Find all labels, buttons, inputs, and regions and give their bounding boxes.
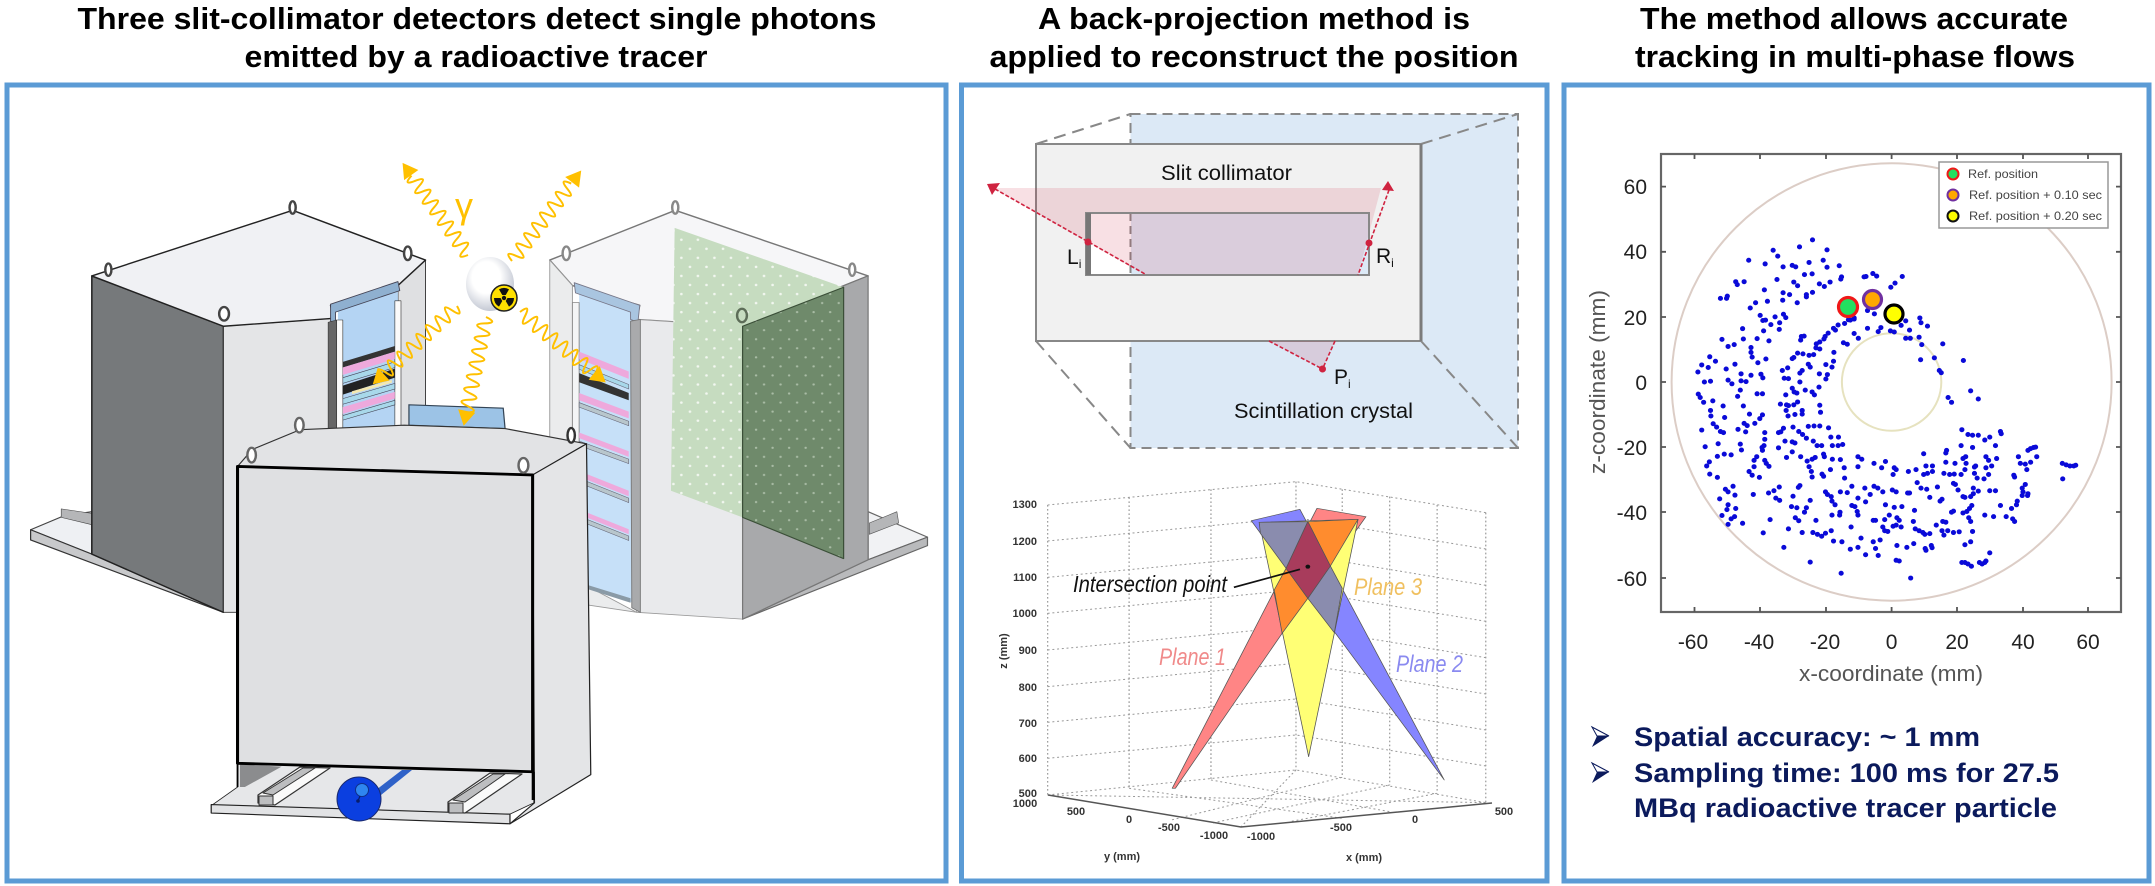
icon: bullet arrow (1592, 763, 1609, 783)
tick labels: 500 (1019, 788, 1037, 800)
tick labels: 1200 (1013, 536, 1037, 548)
heading: detectors: Three slit-collimator detectors detect single photons (78, 1, 876, 36)
tick labels: 1000 (1013, 798, 1037, 810)
panel: tracking results (1564, 85, 2149, 881)
slit collimator plate (1036, 144, 1421, 341)
axes (1048, 795, 1492, 827)
axis tick labels: 20 (1945, 631, 1969, 654)
arrow: gamma ray up-right (506, 168, 586, 265)
tick labels: 900 (1019, 645, 1037, 657)
tick labels: 0 (1126, 814, 1132, 826)
label: gamma: γ (455, 185, 473, 226)
slit opening (1086, 213, 1369, 275)
tick labels: -500 (1330, 822, 1352, 834)
motor knob (337, 770, 412, 821)
arrow: gamma ray down (457, 316, 493, 425)
axis tick labels (1617, 176, 2100, 654)
slit: back detector (409, 405, 505, 429)
gamma rays (369, 160, 609, 425)
tick labels: 1300 (1013, 499, 1037, 511)
key results (1592, 722, 2059, 823)
scintillation crystal (1130, 114, 1518, 448)
icon: bullet arrow (1592, 727, 1609, 747)
icon: radiation trefoil (491, 285, 517, 311)
legend: Ref. position (1968, 167, 2038, 181)
axis tick labels: -60 (1617, 568, 1647, 591)
tick labels: x (mm) (1346, 852, 1382, 864)
chart: intersecting planes (998, 482, 1513, 864)
legend: Ref. position + 0.10 sec (1969, 188, 2102, 202)
axis tick labels: 0 (1635, 372, 1647, 395)
projection triangle (993, 188, 1381, 275)
axis tick labels: 40 (2011, 631, 2035, 654)
axis tick labels: 40 (1624, 241, 1647, 264)
rails (258, 767, 522, 813)
tick labels: 1100 (1013, 572, 1037, 584)
tick labels: y (mm) (1104, 851, 1140, 863)
detector: front (211, 425, 591, 824)
axis tick labels: -20 (1617, 437, 1647, 460)
diagram labels: R (1376, 245, 1391, 268)
plane labels (1073, 571, 1463, 678)
arrow: gamma ray down-left (369, 301, 462, 388)
axis tick labels: 60 (1624, 176, 1647, 199)
tick labels: z (mm) (998, 633, 1010, 669)
plane 3 (1259, 519, 1358, 757)
arrow: gamma ray down-right (516, 307, 609, 387)
tick labels: 700 (1019, 718, 1037, 730)
eyelets (105, 201, 855, 473)
bullet text: Sampling time: 100 ms for 27.5 (1634, 758, 2059, 788)
tick labels: 800 (1019, 682, 1037, 694)
axis titles (1585, 290, 1983, 686)
diagram labels: P (1334, 366, 1348, 389)
heading: back-projection (990, 1, 1518, 74)
heading: detectors: emitted by a radioactive tracer (244, 39, 708, 74)
axis tick labels: -20 (1810, 631, 1840, 654)
bullet text (1634, 722, 2059, 823)
plane 1 (1172, 508, 1366, 788)
heading: back-projection: applied to reconstruct the position (990, 39, 1518, 74)
tick labels: -1000 (1247, 831, 1275, 843)
illustration: three slit-collimator detectors (31, 201, 927, 824)
tick labels: -500 (1158, 822, 1180, 834)
plane 2 (1251, 509, 1444, 780)
heading: tracking (1635, 1, 2075, 74)
axis titles: z-coordinate (mm) (1585, 290, 1610, 474)
legend: Ref. position + 0.20 sec (1969, 209, 2102, 223)
grid (1048, 482, 1486, 827)
tick labels: 500 (1495, 806, 1513, 818)
diagram: slit collimator geometry (987, 114, 1518, 448)
reference position markers (1838, 290, 1903, 323)
axis tick labels: -40 (1617, 502, 1647, 525)
detector: right (550, 210, 927, 619)
diagram labels: Scintillation crystal (1234, 400, 1413, 423)
rays (995, 189, 1389, 369)
axis tick labels: -40 (1744, 631, 1774, 654)
plane labels: Plane 3 (1354, 574, 1423, 601)
panel: back-projection (962, 85, 1547, 881)
scatter plot (1585, 154, 2121, 686)
plane labels: Intersection point (1073, 571, 1228, 597)
vessel outlines (1672, 163, 2112, 601)
axes box (1661, 154, 2121, 612)
tick labels: -1000 (1200, 830, 1228, 842)
axis tick labels: 60 (2076, 631, 2100, 654)
tracer positions (1698, 240, 2076, 578)
detector: left (31, 210, 425, 612)
panel: detectors (7, 85, 946, 881)
heading: back-projection: A back-projection method is (1038, 1, 1470, 36)
diagram labels: i (1391, 256, 1394, 270)
diagram labels: i (1079, 257, 1081, 271)
plane labels: Plane 2 (1396, 651, 1463, 678)
tick labels: 1000 (1013, 608, 1037, 620)
heading: tracking: The method allows accurate (1640, 1, 2068, 36)
tick labels: 600 (1019, 753, 1037, 765)
diagram labels: i (1348, 377, 1351, 391)
bullet text: MBq radioactive tracer particle (1634, 793, 2057, 823)
axis tick labels: 0 (1886, 631, 1897, 654)
diagram labels (1067, 162, 1413, 423)
plane labels: Plane 1 (1159, 644, 1226, 671)
tick labels: 0 (1412, 814, 1418, 826)
axis tick labels: -60 (1678, 631, 1708, 654)
diagram labels: Slit collimator (1161, 162, 1292, 185)
legend (1939, 162, 2108, 228)
axis tick labels: 20 (1624, 307, 1647, 330)
planes (1172, 508, 1444, 788)
heading: tracking: tracking in multi-phase flows (1635, 39, 2075, 74)
tick labels (998, 499, 1513, 864)
bullet text: Spatial accuracy: ~ 1 mm (1634, 722, 1980, 752)
diagram labels: L (1067, 246, 1079, 269)
axis titles: x-coordinate (mm) (1799, 661, 1983, 686)
arrow: gamma ray up-left (398, 160, 474, 259)
radioactive tracer particle (466, 257, 517, 311)
heading: detectors (78, 1, 876, 74)
tick labels: 500 (1067, 806, 1085, 818)
